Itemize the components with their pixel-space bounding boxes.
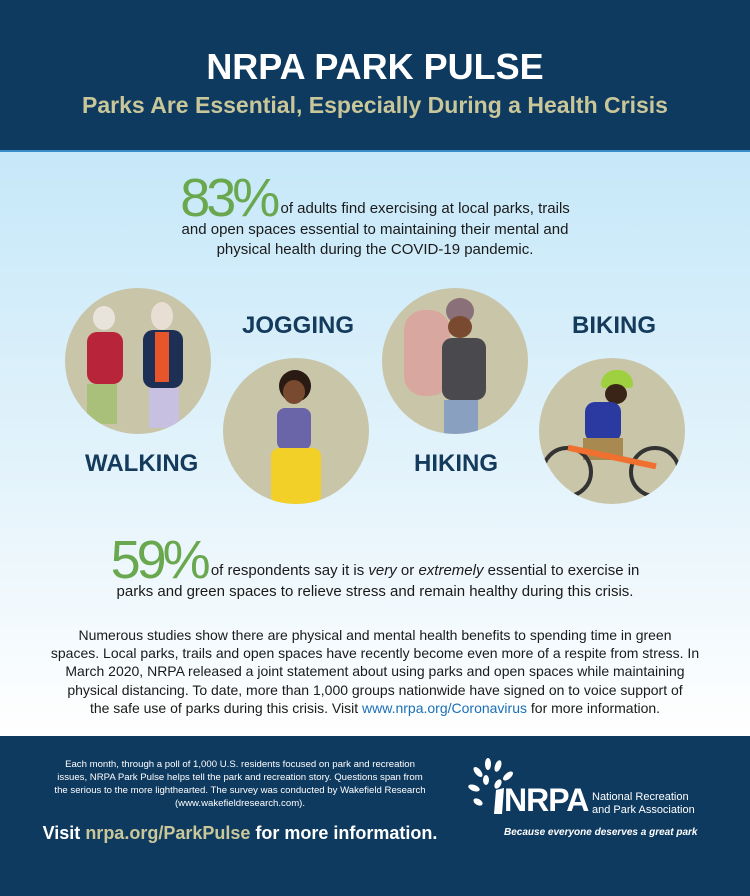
icon: hiker <box>382 288 528 434</box>
activity: hiking <box>382 288 528 477</box>
activity: walking <box>65 288 211 477</box>
logo tagline: Because everyone deserves a great park <box>504 827 697 838</box>
footer text: the serious to the more lighthearted. The survey was conducted by Wakefield Research <box>54 785 426 796</box>
body paragraph: Numerous studies show there are physical and mental health benefits to spending time in green <box>78 627 672 643</box>
footer text: Each month, through a poll of 1,000 U.S. residents focused on park and recreation <box>65 759 415 770</box>
body paragraph: March 2020, NRPA released a joint statement about using parks and open spaces while maintaining <box>65 663 685 679</box>
stat 83%: 83% of adults find exercising at local parks, trails <box>180 168 570 228</box>
label: biking: BIKING <box>572 312 656 339</box>
logo: NRPA <box>468 758 698 838</box>
icon: cyclist <box>539 358 685 504</box>
stat 83%: and open spaces essential to maintaining their mental and <box>182 221 568 238</box>
footer text <box>54 759 426 809</box>
label: jogging: JOGGING <box>242 312 354 339</box>
label: walking: WALKING <box>85 450 198 477</box>
footer text: issues, NRPA Park Pulse helps tell the park and recreation story. Questions span from <box>57 772 423 783</box>
activity: biking <box>539 312 685 504</box>
footer <box>0 736 750 896</box>
stat 83% <box>180 168 570 258</box>
logo: NRPA: National Recreation <box>592 791 689 803</box>
icon: tree leaves <box>468 758 513 814</box>
activity: jogging <box>223 312 369 504</box>
body paragraph: physical distancing. To date, more than 1,000 groups nationwide have signed on to voice support of <box>67 682 683 698</box>
stat 83%: physical health during the COVID-19 pandemic. <box>217 240 533 258</box>
title: NRPA PARK PULSE <box>206 46 544 87</box>
header <box>0 0 750 152</box>
footer call to action: Visit nrpa.org/ParkPulse for more information. <box>43 823 437 843</box>
logo: NRPA: and Park Association <box>592 804 695 816</box>
body paragraph: spaces. Local parks, trails and open spaces have recently become even more of a respite from stress. In <box>51 645 699 661</box>
icon: walking couple <box>65 288 211 434</box>
icon: jogger <box>223 358 369 504</box>
footer text: (www.wakefieldresearch.com). <box>175 798 305 809</box>
subtitle: Parks Are Essential, Especially During a Health Crisis <box>82 92 668 118</box>
label: hiking: HIKING <box>414 450 498 477</box>
body paragraph <box>51 627 699 716</box>
logo wordmark: NRPA <box>504 782 588 818</box>
body paragraph: the safe use of parks during this crisis. Visit www.nrpa.org/Coronavirus for more information. <box>90 700 660 716</box>
stat 59%: 59% of respondents say it is very or extremely essential to exercise in <box>111 530 639 590</box>
stat 59%: parks and green spaces to relieve stress and remain healthy during this crisis. <box>117 583 633 600</box>
